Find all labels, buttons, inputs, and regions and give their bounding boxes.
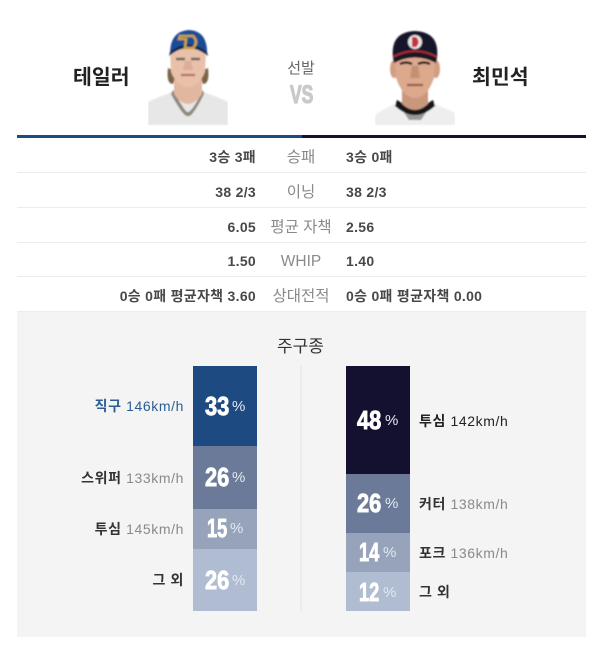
row: innings: 이닝	[287, 184, 315, 201]
row: head to head	[17, 277, 586, 312]
segment: sinker 15: 15	[207, 513, 227, 543]
row: WHIP	[17, 242, 586, 277]
segment: cutter 26	[346, 474, 410, 533]
row: WHIP: 1.50	[228, 253, 256, 269]
right pitch labels	[419, 413, 508, 600]
segment: others 12: %	[383, 584, 396, 601]
label: others: 그 외	[153, 572, 184, 588]
label: others: 그 외	[419, 584, 450, 600]
label: cutter: 커터 138km/h	[419, 496, 508, 512]
segment: cutter 26: 26	[357, 488, 381, 518]
stacked bar: Taylor pitches	[193, 366, 257, 611]
segment: others 26	[193, 548, 257, 611]
segment: others 26: %	[232, 572, 245, 588]
left pitch labels	[81, 398, 184, 588]
segment: sweeper 26: %	[232, 469, 245, 486]
player photo: Choi Min-seok	[375, 30, 455, 125]
segment: sinker 48: 48	[357, 405, 381, 435]
row: innings	[17, 173, 586, 208]
segment: sweeper 26	[193, 446, 257, 509]
team color rule	[17, 135, 586, 138]
row: WHIP: WHIP	[281, 253, 321, 270]
segment: fastball 33: %	[232, 398, 245, 415]
row: head to head: 상대전적	[272, 288, 330, 305]
row: WHIP: 1.40	[346, 253, 374, 269]
row: record: 3승 0패	[346, 149, 393, 165]
vs mark: VS	[290, 81, 313, 109]
segment: others 12	[346, 572, 410, 611]
row: record: 승패	[287, 149, 315, 166]
segment: cutter 26: %	[385, 495, 398, 512]
player name: Choi Min-seok: 최민석	[472, 66, 529, 89]
label: starter: 선발	[287, 60, 315, 77]
segment: fastball 33: 33	[205, 391, 229, 421]
segment: others 26: 26	[205, 564, 229, 594]
segment: sweeper 26: 26	[205, 462, 229, 492]
label: forkball: 포크 136km/h	[419, 545, 508, 561]
row: ERA: 2.56	[346, 219, 374, 235]
player photo: Taylor	[148, 29, 228, 125]
segment: sinker 48: %	[385, 412, 398, 429]
row: ERA: 평균 자책	[270, 219, 332, 236]
vs block	[287, 60, 315, 109]
segment: forkball 14: %	[383, 544, 396, 561]
segment: forkball 14: 14	[359, 537, 379, 567]
segment: others 12: 12	[359, 577, 379, 607]
player name: Taylor: 테일러	[73, 66, 130, 89]
center divider	[300, 366, 302, 611]
stacked bar: Choi pitches	[346, 366, 410, 611]
row: head to head: 0승 0패 평균자책 3.60	[120, 288, 256, 304]
row: record: 3승 3패	[209, 149, 256, 165]
label: sinker: 투심 142km/h	[419, 413, 508, 429]
panel heading: 주구종	[277, 337, 324, 356]
label: fastball: 직구 146km/h	[95, 398, 184, 414]
stats table	[17, 149, 586, 312]
row: innings: 38 2/3	[215, 184, 256, 200]
row: ERA	[17, 208, 586, 243]
label: sweeper: 스위퍼 133km/h	[81, 470, 184, 486]
panel: main pitches	[17, 312, 586, 637]
segment: fastball 33	[193, 366, 257, 446]
row: innings: 38 2/3	[346, 184, 387, 200]
segment: sinker 48	[346, 366, 410, 474]
label: sinker: 투심 145km/h	[95, 521, 184, 537]
segment: forkball 14	[346, 533, 410, 572]
row: ERA: 6.05	[228, 219, 256, 235]
segment: sinker 15: %	[230, 520, 243, 537]
row: record	[17, 138, 586, 173]
segment: sinker 15	[193, 509, 257, 548]
row: head to head: 0승 0패 평균자책 0.00	[346, 288, 482, 304]
